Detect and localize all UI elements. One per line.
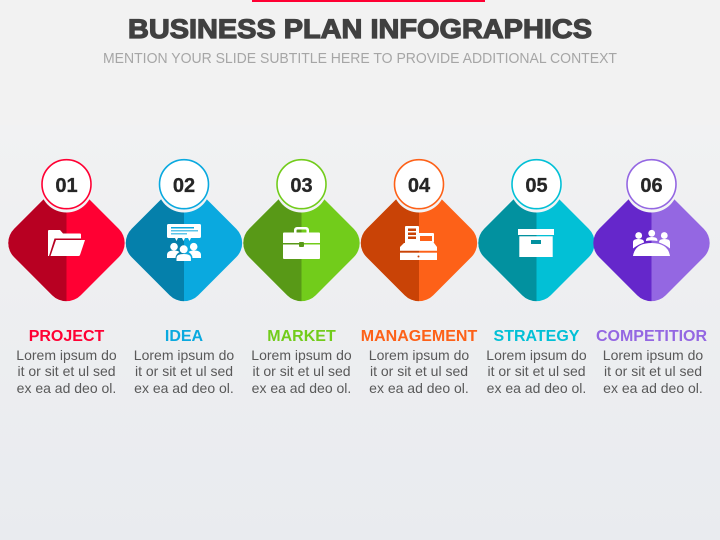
diamond 04 [360,199,478,302]
text: idea: it or sit et ul sed [135,363,233,379]
panel: 06 competition [593,158,710,393]
heading: market: MARKET [267,328,336,345]
text: market: Lorem ipsum do [251,347,352,363]
icon: meeting with speech bubble [167,224,201,261]
panel: 04 management [360,158,478,393]
diamond 06 [593,199,710,302]
number badge 06 [625,160,678,212]
icon: boardroom table [633,230,670,256]
subtitle: MENTION YOUR SLIDE SUBTITLE HERE TO PROVIDE ADDITIONAL CONTEXT [103,51,617,67]
text: strategy: Lorem ipsum do [486,347,587,363]
number badge 02 [158,160,210,212]
number badge 03 [275,160,328,212]
number badge 05 [510,160,563,212]
number badge 05: 05 [525,175,548,197]
number badge 01: 01 [55,175,78,197]
text: strategy: it or sit et ul sed [487,363,586,379]
text: idea: Lorem ipsum do [134,347,234,363]
text: competition: ex ea ad deo ol. [603,380,703,396]
panel: 02 idea [126,158,242,393]
text: idea: ex ea ad deo ol. [134,380,234,396]
number badge 02: 02 [173,175,195,197]
diamond 05 [478,199,594,302]
heading: idea: IDEA [165,328,204,345]
title: BUSINESS PLAN INFOGRAPHICS [128,14,592,44]
panel: 01 project [8,158,125,393]
icon: cash register [400,226,437,260]
panel: 03 market [243,158,360,393]
text: project: ex ea ad deo ol. [17,380,116,396]
heading: management: MANAGEMENT [361,328,477,345]
text: management: it or sit et ul sed [370,363,468,379]
text: management: ex ea ad deo ol. [369,380,469,396]
number badge 01 [40,160,93,212]
icon: folder [48,230,85,256]
text: project: Lorem ipsum do [16,347,117,363]
diamond 01 [8,199,125,302]
top accent bar [252,0,485,2]
text: strategy: ex ea ad deo ol. [487,380,586,396]
number badge 04 [392,160,446,212]
diamond 03 [243,199,360,302]
number badge 06: 06 [640,175,663,197]
text: project: it or sit et ul sed [17,363,116,379]
panel: 05 strategy [478,158,594,393]
heading: strategy: STRATEGY [494,328,580,345]
text: market: ex ea ad deo ol. [252,380,351,396]
diamond 02 [126,199,242,302]
icon: briefcase [283,227,320,259]
text: management: Lorem ipsum do [369,347,469,363]
text: competition: it or sit et ul sed [604,363,702,379]
number badge 03: 03 [290,175,313,197]
text: competition: Lorem ipsum do [603,347,703,363]
number badge 04: 04 [408,175,431,197]
heading: competition: COMPETITIOR [596,328,708,345]
icon: archive box [518,229,554,257]
heading: project: PROJECT [29,328,105,345]
text: market: it or sit et ul sed [252,363,351,379]
